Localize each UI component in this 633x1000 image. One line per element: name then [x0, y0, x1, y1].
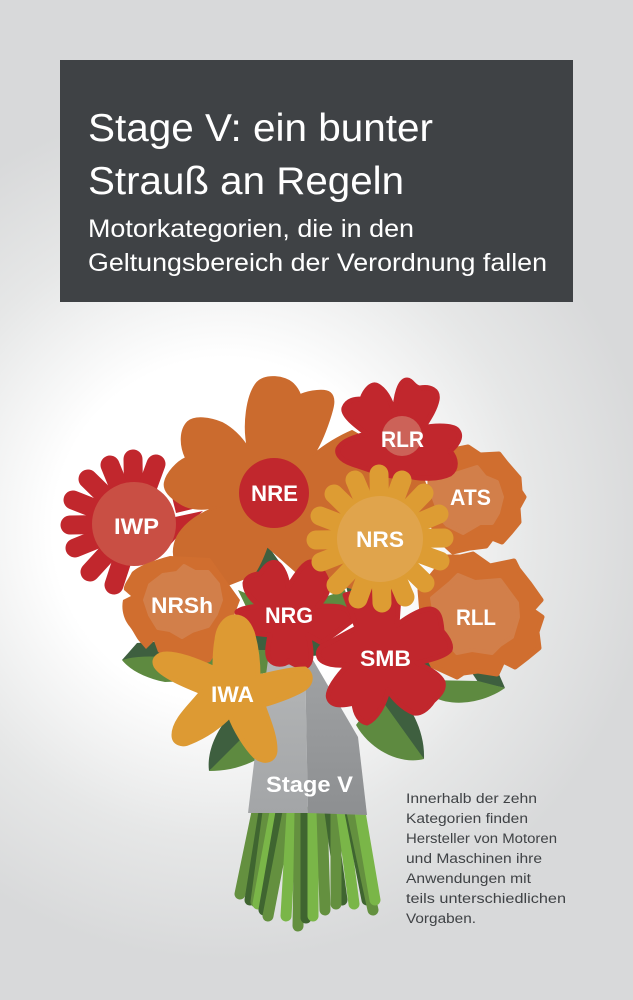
- subtitle: [88, 215, 547, 277]
- flower: NRSh: NRSh: [151, 593, 213, 618]
- subtitle: Motorkategorien, die in den: [88, 215, 414, 243]
- subtitle: Geltungsbereich der Verordnung fallen: [88, 249, 547, 277]
- title: [88, 107, 433, 203]
- bouquet illustration: [70, 377, 542, 926]
- caption text: teils unterschiedlichen: [406, 891, 566, 906]
- caption text: Kategorien finden: [406, 811, 528, 826]
- flower: RLL: [420, 554, 542, 677]
- caption text: Vorgaben.: [406, 911, 476, 926]
- title: Stage V: ein bunter: [88, 107, 433, 150]
- flower: ATS: [430, 447, 524, 552]
- caption text: Innerhalb der zehn: [406, 791, 537, 806]
- flower: NRE: NRE: [251, 481, 298, 506]
- stems: [240, 812, 375, 926]
- wrapping paper: [248, 660, 367, 815]
- title: Strauß an Regeln: [88, 160, 404, 203]
- wrapper label: Stage V: [266, 772, 353, 797]
- flower: NRG: [237, 562, 353, 666]
- caption text: [406, 791, 566, 926]
- flower: RLR: RLR: [381, 427, 424, 452]
- flower: NRS: [316, 474, 444, 603]
- flower: SMB: [318, 580, 451, 723]
- flower: NRSh: [122, 556, 240, 664]
- flower: IWA: IWA: [211, 682, 254, 707]
- flower: RLR: [338, 380, 460, 478]
- caption text: und Maschinen ihre: [406, 851, 542, 866]
- flower: NRE: [165, 377, 435, 590]
- flower: IWP: IWP: [114, 514, 159, 539]
- flower: NRS: NRS: [356, 527, 404, 552]
- leaves: [122, 543, 505, 771]
- caption text: Hersteller von Motoren: [406, 831, 557, 846]
- flower: ATS: ATS: [450, 485, 491, 510]
- flower: IWA: [155, 617, 310, 760]
- caption text: Anwendungen mit: [406, 871, 531, 886]
- flower: NRG: NRG: [265, 603, 313, 628]
- flower: SMB: SMB: [360, 646, 411, 671]
- flower: RLL: RLL: [456, 605, 496, 630]
- header panel: [60, 60, 573, 302]
- flower: IWP: [70, 459, 203, 585]
